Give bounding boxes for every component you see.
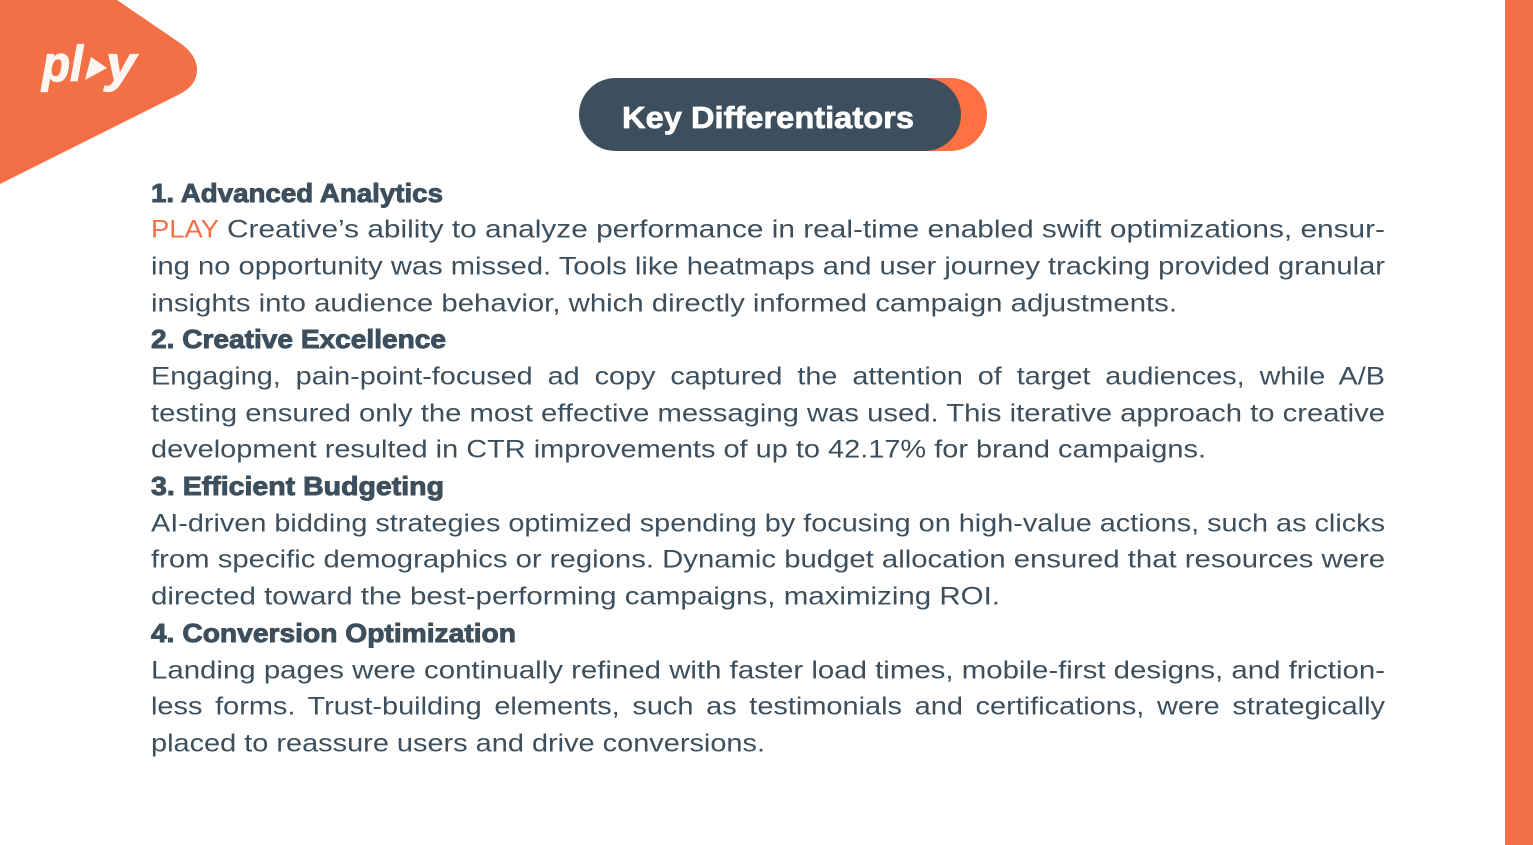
title pill: Key Differentiators <box>579 78 987 151</box>
body 1: ing no opportunity was missed. Tools like heatmaps and user journey tracking provided granular <box>151 252 1385 280</box>
logo badge <box>0 0 197 184</box>
logo wordmark: play: pl <box>40 36 84 92</box>
section 3: Efficient Budgeting <box>151 471 1385 610</box>
body 4 <box>151 656 1386 758</box>
body 2: development resulted in CTR improvements of up to 42.17% for brand campaigns. <box>151 436 1206 464</box>
body 3: from specific demographics or regions. Dynamic budget allocation ensured that resources were <box>151 546 1385 574</box>
section 1: Advanced Analytics <box>151 178 1385 318</box>
body 2: testing ensured only the most effective messaging was used. This iterative approach to creative <box>151 400 1385 428</box>
body 4: less forms. Trust-building elements, such as testimonials and certifications, were strategically <box>151 692 1386 720</box>
body 1: Creative’s ability to analyze performance in real-time enabled swift optimizations, ensur- <box>227 216 1385 244</box>
body 1 <box>151 216 1385 318</box>
body 2: Engaging, pain-point-focused ad copy captured the attention of target audiences, while A/B <box>151 362 1385 390</box>
right orange sidebar <box>1505 0 1533 845</box>
body 3: directed toward the best-performing campaigns, maximizing ROI. <box>151 582 1000 610</box>
logo wordmark: play <box>40 36 138 92</box>
heading 3: 3. Efficient Budgeting <box>151 471 444 501</box>
body 4: Landing pages were continually refined with faster load times, mobile-first designs, and friction- <box>151 656 1385 684</box>
heading 1: 1. Advanced Analytics <box>151 178 443 208</box>
heading 2: 2. Creative Excellence <box>151 324 446 354</box>
body 4: placed to reassure users and drive conversions. <box>151 730 765 758</box>
heading 4: 4. Conversion Optimization <box>151 618 516 648</box>
section 2: Creative Excellence <box>151 324 1385 464</box>
logo wordmark: play: y <box>103 36 138 92</box>
body 1: insights into audience behavior, which directly informed campaign adjustments. <box>151 290 1177 318</box>
body 3: AI-driven bidding strategies optimized spending by focusing on high-value actions, such as clicks <box>151 510 1385 538</box>
body 1: PLAY <box>151 216 219 244</box>
body 3 <box>151 510 1385 610</box>
title pill: Key Differentiators: Key Differentiators <box>622 100 914 135</box>
section 4: Conversion Optimization <box>151 618 1386 758</box>
body 2 <box>151 362 1385 464</box>
